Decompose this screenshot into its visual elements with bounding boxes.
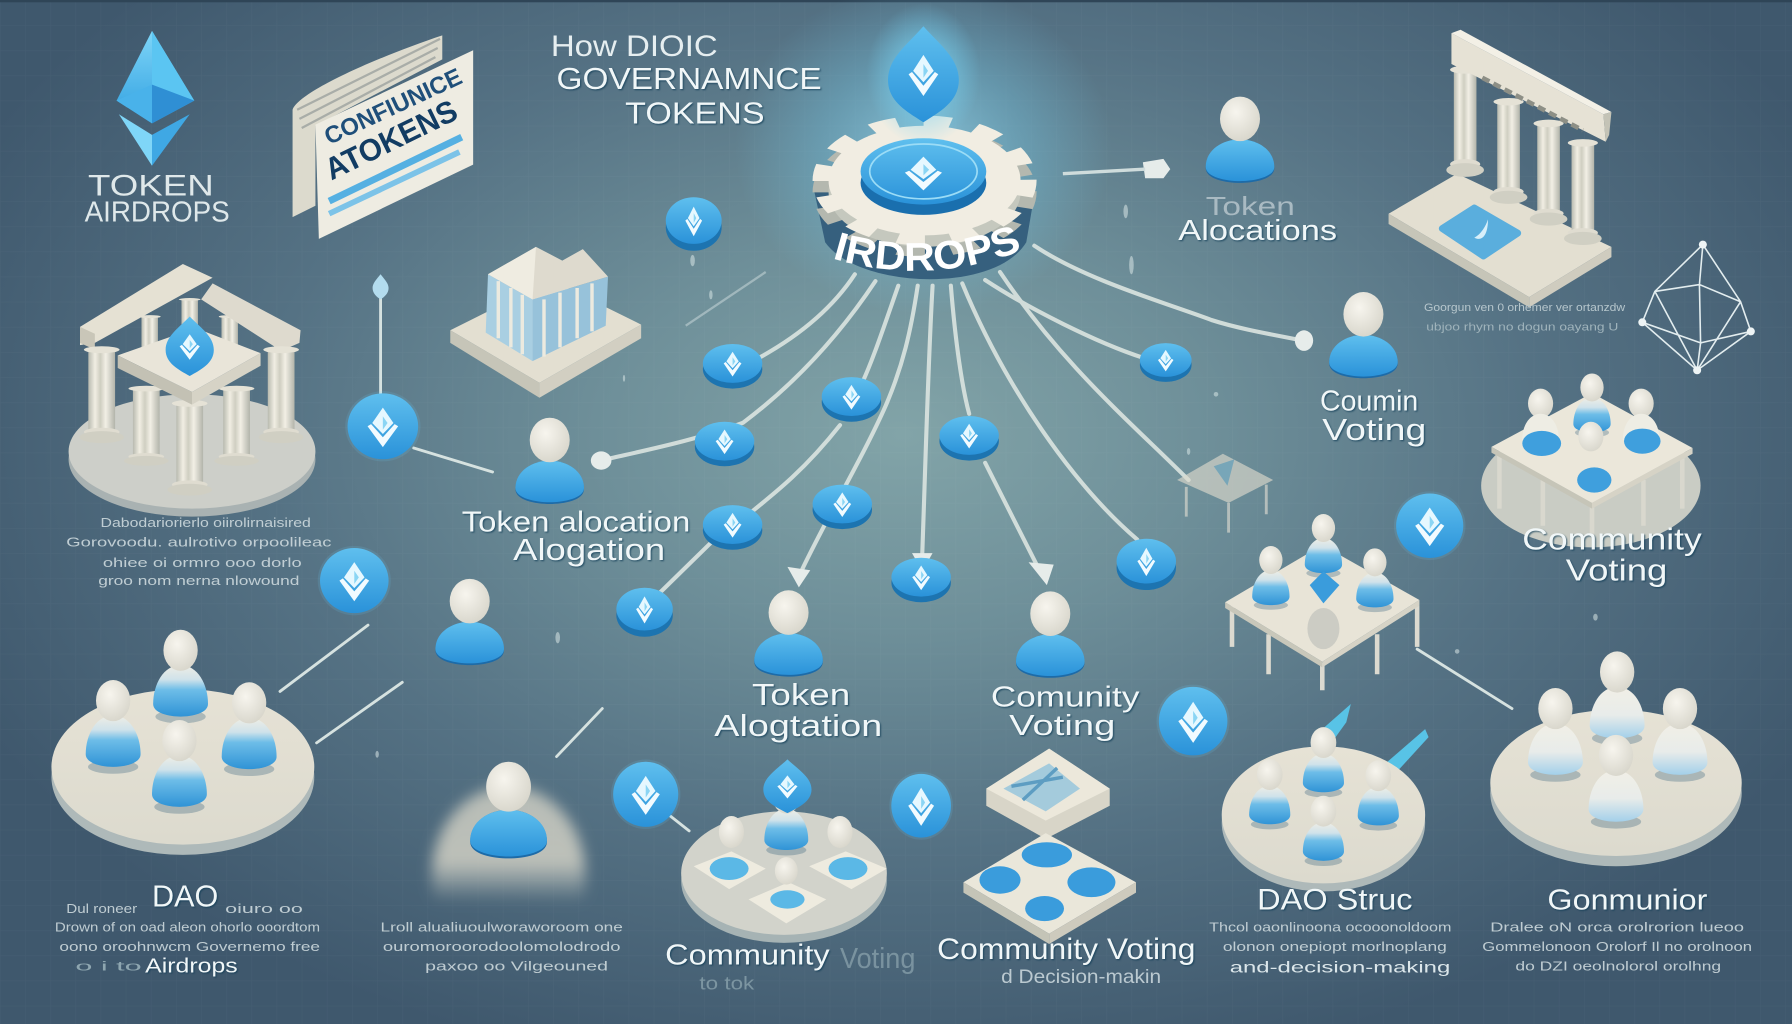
label and text: DAO: oiuro oo: [225, 902, 303, 916]
title: [551, 30, 822, 130]
label: community voting right: [1522, 522, 1702, 588]
label and text: DAO: Airdrops: [145, 955, 238, 978]
icon: stacked voting tiles: [963, 749, 1136, 944]
label: community voting right: Voting: [1566, 553, 1667, 588]
icon: bank building: [450, 247, 641, 398]
logo label: token airdrops: [85, 169, 230, 229]
group: DAO structure disc: [1222, 704, 1429, 891]
caption: temple: ubjoo rhym no dogun oayang U: [1426, 321, 1618, 333]
label: community voting decision-making: d Decision-makin: [1001, 966, 1161, 988]
radial connector lines: [606, 246, 1297, 592]
text block: left temple: ohiee oi ormro ooo dorlo: [103, 556, 302, 570]
group: community small disc: [681, 759, 887, 943]
label: voting right: Voting: [1322, 412, 1426, 447]
label and text: community right: Gonmunior: [1547, 885, 1708, 917]
pin marker: [373, 274, 389, 299]
label: voting right: [1320, 385, 1426, 447]
flat glowing tokens: [318, 391, 1466, 840]
icon: ethereum logo: [117, 31, 194, 166]
label: community voting middle: Comunity: [991, 681, 1140, 713]
icon: token card: ATOKENS: [319, 93, 463, 187]
label: token allocation left: [462, 506, 690, 567]
label and text: DAO structure: olonon onepiopt morlnoplang: [1223, 940, 1447, 954]
group: community large disc: [1490, 651, 1742, 866]
label and text: community right: Dralee oN orca orolrorion lueoo: [1490, 920, 1744, 934]
caption: temple: [1424, 302, 1626, 333]
label: token allocations top: [1178, 191, 1337, 247]
label: community voting decision-making: [937, 933, 1195, 988]
short connector: gear to person: [1063, 169, 1145, 174]
text block: spotlight person: Lroll alualiuoulworaworoom one: [381, 920, 623, 934]
label and text: DAO: o i to: [75, 959, 142, 973]
label and text: community right: [1482, 885, 1752, 973]
label: token allocations top: Token: [1206, 191, 1295, 221]
line arrowheads: [591, 159, 1313, 587]
label and text: DAO: oono oroohnwcm Governemo free: [59, 940, 320, 954]
group: DAO left disc: [51, 630, 314, 855]
icon: token card: [293, 35, 473, 239]
label: token allocation left: Alogation: [513, 532, 665, 567]
group: top right table and people: [1481, 373, 1701, 547]
label: token allocation middle: Token: [752, 677, 850, 712]
text block: spotlight person: ouromoroorodoolomolodrodo: [383, 940, 621, 954]
text block: left temple: Gorovoodu. aulrotivo orpoolileac: [66, 535, 331, 549]
label: community voting bottom: Community: [665, 940, 831, 972]
label and text: DAO structure: Thcol oaonlinoona ocooonoldoom: [1209, 920, 1451, 934]
label and text: DAO: Drown of on oad aleon ohorlo ooordtom: [55, 920, 320, 934]
label: token allocation middle: [714, 677, 882, 743]
icon: wireframe polyhedron: [1638, 241, 1755, 374]
text block: spotlight person: paxoo oo Vilgeouned: [425, 959, 608, 973]
person with spotlight: [432, 762, 585, 903]
icon: faded table: [1177, 454, 1273, 533]
central hub: gear airdrops: [812, 116, 1037, 280]
center glow: [735, 0, 1112, 314]
label and text: DAO: DAO: [152, 878, 218, 913]
label: voting right: Coumin: [1320, 385, 1418, 417]
label and text: DAO structure: [1209, 884, 1451, 977]
logo label: token airdrops: TOKEN: [88, 169, 214, 202]
label: community voting bottom: [665, 940, 915, 994]
label: community voting bottom: Voting: [840, 943, 915, 975]
short connectors: lower lines: [280, 295, 1512, 831]
label and text: DAO: [55, 878, 320, 978]
caption: temple: Goorgun ven 0 orhemer ver ortanzdw: [1424, 302, 1626, 314]
icon: token card: CONFIUNICE: [320, 63, 466, 151]
label and text: DAO structure: and-decision-making: [1230, 960, 1450, 977]
label: token allocations top: Alocations: [1178, 215, 1337, 247]
title: TOKENS: [625, 95, 765, 130]
label and text: DAO structure: DAO Struc: [1257, 884, 1413, 917]
icon: left temple: [69, 264, 315, 517]
person icons: [435, 97, 1398, 678]
label and text: DAO: Dul roneer: [66, 902, 137, 916]
text block: left temple: Dabodariorierlo oiirolirnaisired: [101, 516, 311, 530]
label: community voting bottom: to tok: [699, 973, 755, 994]
small coin tokens: [616, 197, 1192, 637]
top drop token: [866, 3, 981, 145]
label: community voting right: Community: [1522, 522, 1702, 557]
logo label: token airdrops: AIRDROPS: [85, 197, 230, 229]
label: token allocation middle: Alogtation: [714, 708, 882, 743]
title: GOVERNAMNCE: [557, 61, 822, 96]
text block: left temple: [66, 516, 331, 588]
label: community voting middle: [991, 681, 1140, 742]
label: community voting middle: Voting: [1009, 710, 1115, 742]
icon: top right temple: [1389, 30, 1611, 307]
label and text: community right: do DZI oeolnolorol orolhng: [1515, 959, 1721, 973]
text block: spotlight person: [381, 920, 623, 973]
icon: center table with people: [1225, 514, 1419, 690]
text block: left temple: groo nom nerna nlowound: [98, 574, 299, 588]
label and text: community right: Gommelonoon Orolorf Il no orolnoon: [1482, 940, 1752, 954]
label: community voting decision-making: Community Voting: [937, 933, 1195, 966]
title: How DIOIC: [551, 30, 718, 63]
central hub: gear airdrops: IRDROPS: [834, 227, 1019, 271]
label: token allocation left: Token alocation: [462, 506, 690, 538]
